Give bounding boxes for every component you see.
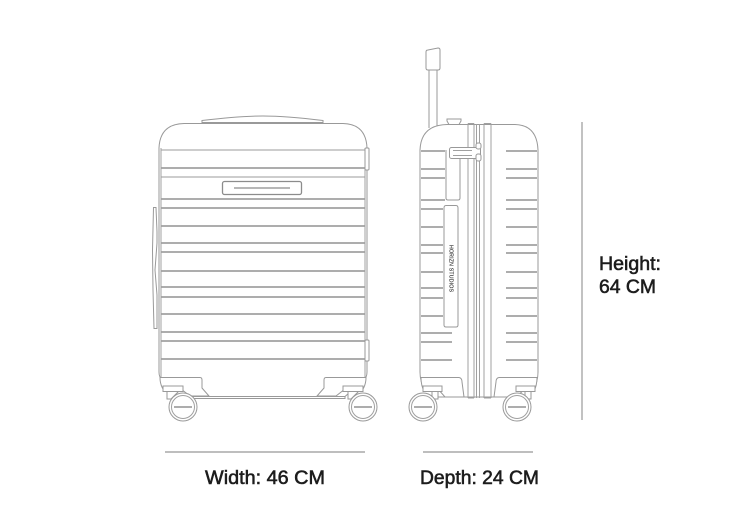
side body <box>420 124 538 397</box>
left ribs <box>421 151 452 360</box>
bottom rail <box>185 396 345 398</box>
right caster <box>343 386 377 421</box>
right ribs <box>506 151 537 360</box>
brand plate <box>222 182 302 194</box>
right wheel housing <box>494 378 537 397</box>
telescopic handle <box>426 48 440 128</box>
horizontal ribs <box>161 150 365 359</box>
right wheel housing <box>317 378 366 396</box>
upper side panel <box>446 150 460 200</box>
inner side edge <box>161 148 365 377</box>
zipper pull <box>450 143 481 161</box>
front view of suitcase <box>152 116 377 421</box>
width dimension line <box>165 451 365 453</box>
logo text: HORIZN STUDIOS <box>448 245 454 293</box>
width label: Width: 46 CM <box>205 468 325 489</box>
left side handle <box>152 208 157 328</box>
depth dimension line <box>423 451 533 453</box>
height label: Height: <box>599 254 661 275</box>
right caster <box>503 386 535 421</box>
lower side panel with logo <box>444 206 458 327</box>
left wheel housing <box>160 378 209 396</box>
vertical zipper bands <box>468 124 491 398</box>
depth label: Depth: 24 CM <box>420 468 539 489</box>
height label: 64 CM <box>599 277 656 298</box>
right side clips <box>365 148 369 170</box>
side view of suitcase <box>409 48 538 421</box>
suitcase body <box>159 124 367 396</box>
left caster <box>163 386 197 421</box>
left wheel housing <box>421 378 464 397</box>
top button <box>447 119 461 124</box>
top carry handle <box>202 116 323 122</box>
left caster <box>409 386 442 421</box>
height label <box>599 254 661 298</box>
height dimension line <box>581 122 583 420</box>
